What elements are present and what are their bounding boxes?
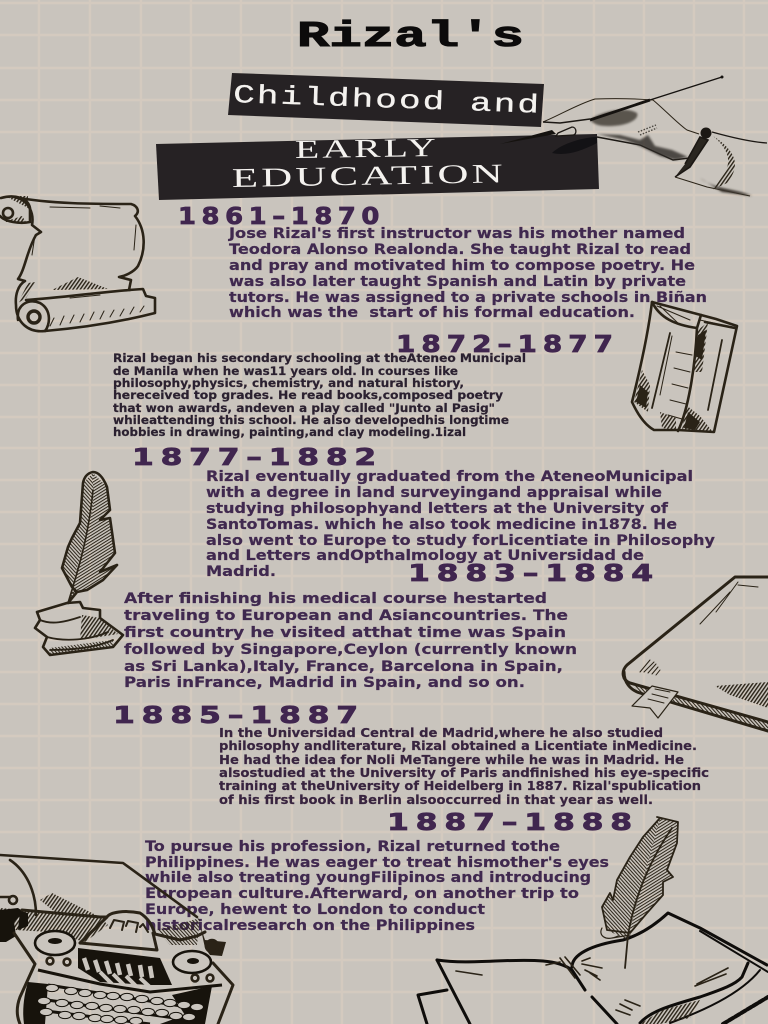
body text: whileattending this school. He also developedhis longtime bbox=[113, 413, 509, 427]
icon: open book with feather bbox=[418, 817, 768, 1024]
body text: After finishing his medical course hestarted bbox=[124, 591, 547, 607]
body text: studying philosophyand letters at the University of bbox=[206, 501, 669, 517]
body text: Madrid. bbox=[206, 564, 276, 580]
timeline entry: 1877–1882 bbox=[132, 445, 715, 580]
banner: Early Education bbox=[156, 133, 599, 200]
body text: and pray and motivated him to compose poetry. He bbox=[229, 258, 695, 274]
body text: philosophy,physics, chemistry, and natural history, bbox=[113, 376, 464, 390]
body text: alsostudied at the University of Paris andfinished his eye-specific bbox=[219, 766, 709, 780]
icon: scroll bbox=[0, 196, 155, 331]
icon: closed book with bookmark bbox=[623, 577, 768, 731]
body text: Philippines. He was eager to treat hismother's eyes bbox=[145, 855, 609, 871]
body text bbox=[124, 591, 577, 691]
icon: typewriter bbox=[0, 855, 233, 1024]
year heading: 1877–1882 bbox=[132, 445, 383, 471]
icon: feather in inkwell bbox=[35, 472, 123, 655]
body text bbox=[113, 351, 526, 439]
body text: In the Universidad Central de Madrid,where he also studied bbox=[219, 726, 663, 740]
body text: with a degree in land surveyingand appraisal while bbox=[206, 485, 662, 501]
title: Rizal's bbox=[297, 16, 524, 57]
timeline entry: 1883–1884 bbox=[124, 561, 660, 691]
body text: Paris inFrance, Madrid in Spain, and so on. bbox=[124, 675, 525, 691]
body text: traveling to European and Asiancountries. The bbox=[124, 608, 568, 624]
body text: and Letters andOpthalmology at Universidad de bbox=[206, 548, 644, 564]
year heading: 1887–1888 bbox=[387, 810, 639, 836]
body text bbox=[219, 726, 709, 807]
body text: He had the idea for Noli MeTangere while he was in Madrid. He bbox=[219, 753, 684, 767]
body text: while also treating youngFilipinos and introducing bbox=[145, 870, 591, 886]
year heading: 1885–1887 bbox=[113, 703, 365, 729]
timeline entry: 1872–1877 bbox=[113, 332, 619, 439]
body text: training at theUniversity of Heidelberg in 1887. Rizal'spublication bbox=[219, 779, 701, 793]
body text: Jose Rizal's first instructor was his mother named bbox=[228, 226, 685, 242]
banner: Early Education: EDUCATION bbox=[232, 158, 506, 193]
body text: first country he visited atthat time was Spain bbox=[124, 625, 566, 641]
body text: Rizal eventually graduated from the AteneoMunicipal bbox=[206, 469, 693, 485]
body text: also went to Europe to study forLicentiate in Philosophy bbox=[206, 533, 715, 549]
body text: To pursue his profession, Rizal returned tothe bbox=[145, 839, 560, 855]
body text: as Sri Lanka),Italy, France, Barcelona in Spain, bbox=[124, 659, 563, 675]
body text: hereceived top grades. He read books,composed poetry bbox=[113, 388, 504, 402]
body text: was also later taught Spanish and Latin by private bbox=[229, 274, 686, 290]
body text: Europe, hewent to London to conduct bbox=[145, 902, 485, 918]
body text: philosophy andliterature, Rizal obtained a Licentiate inMedicine. bbox=[219, 739, 697, 753]
body text: that won awards, andeven a play called "Junto al Pasig" bbox=[113, 401, 495, 415]
body text: of his first book in Berlin alsooccurred in that year as well. bbox=[219, 793, 653, 807]
body text bbox=[206, 469, 715, 580]
body text bbox=[228, 226, 707, 321]
body text: tutors. He was assigned to a private schools in Biñan bbox=[229, 290, 707, 306]
body text: de Manila when he was11 years old. In courses like bbox=[113, 364, 458, 378]
icon: hand holding brush bbox=[500, 76, 767, 196]
body text: SantoTomas. which he also took medicine in1878. He bbox=[206, 517, 677, 533]
body text: European culture.Afterward, on another trip to bbox=[145, 886, 579, 902]
body text: Teodora Alonso Realonda. She taught Rizal to read bbox=[229, 242, 691, 258]
body text: historicalresearch on the Philippines bbox=[145, 918, 475, 934]
body text: Rizal began his secondary schooling at theAteneo Municipal bbox=[113, 351, 526, 365]
body text: hobbies in drawing, painting,and clay modeling.1izal bbox=[113, 425, 466, 439]
year heading: 1872–1877 bbox=[396, 332, 619, 358]
year heading: 1883–1884 bbox=[408, 561, 660, 587]
banner: Childhood and: Childhood and bbox=[233, 80, 542, 121]
year heading: 1861–1870 bbox=[178, 204, 385, 230]
banner: Early Education: EARLY bbox=[295, 133, 439, 164]
icon: stack of books bbox=[632, 302, 737, 432]
timeline entry: 1887–1888 bbox=[145, 810, 639, 934]
banner: Childhood and bbox=[228, 73, 544, 127]
body text: which was the start of his formal education. bbox=[229, 305, 635, 321]
timeline entry: 1861–1870 bbox=[178, 204, 707, 321]
body text bbox=[145, 839, 609, 934]
body text: followed by Singapore,Ceylon (currently known bbox=[124, 642, 577, 658]
timeline entry: 1885–1887 bbox=[113, 703, 709, 807]
